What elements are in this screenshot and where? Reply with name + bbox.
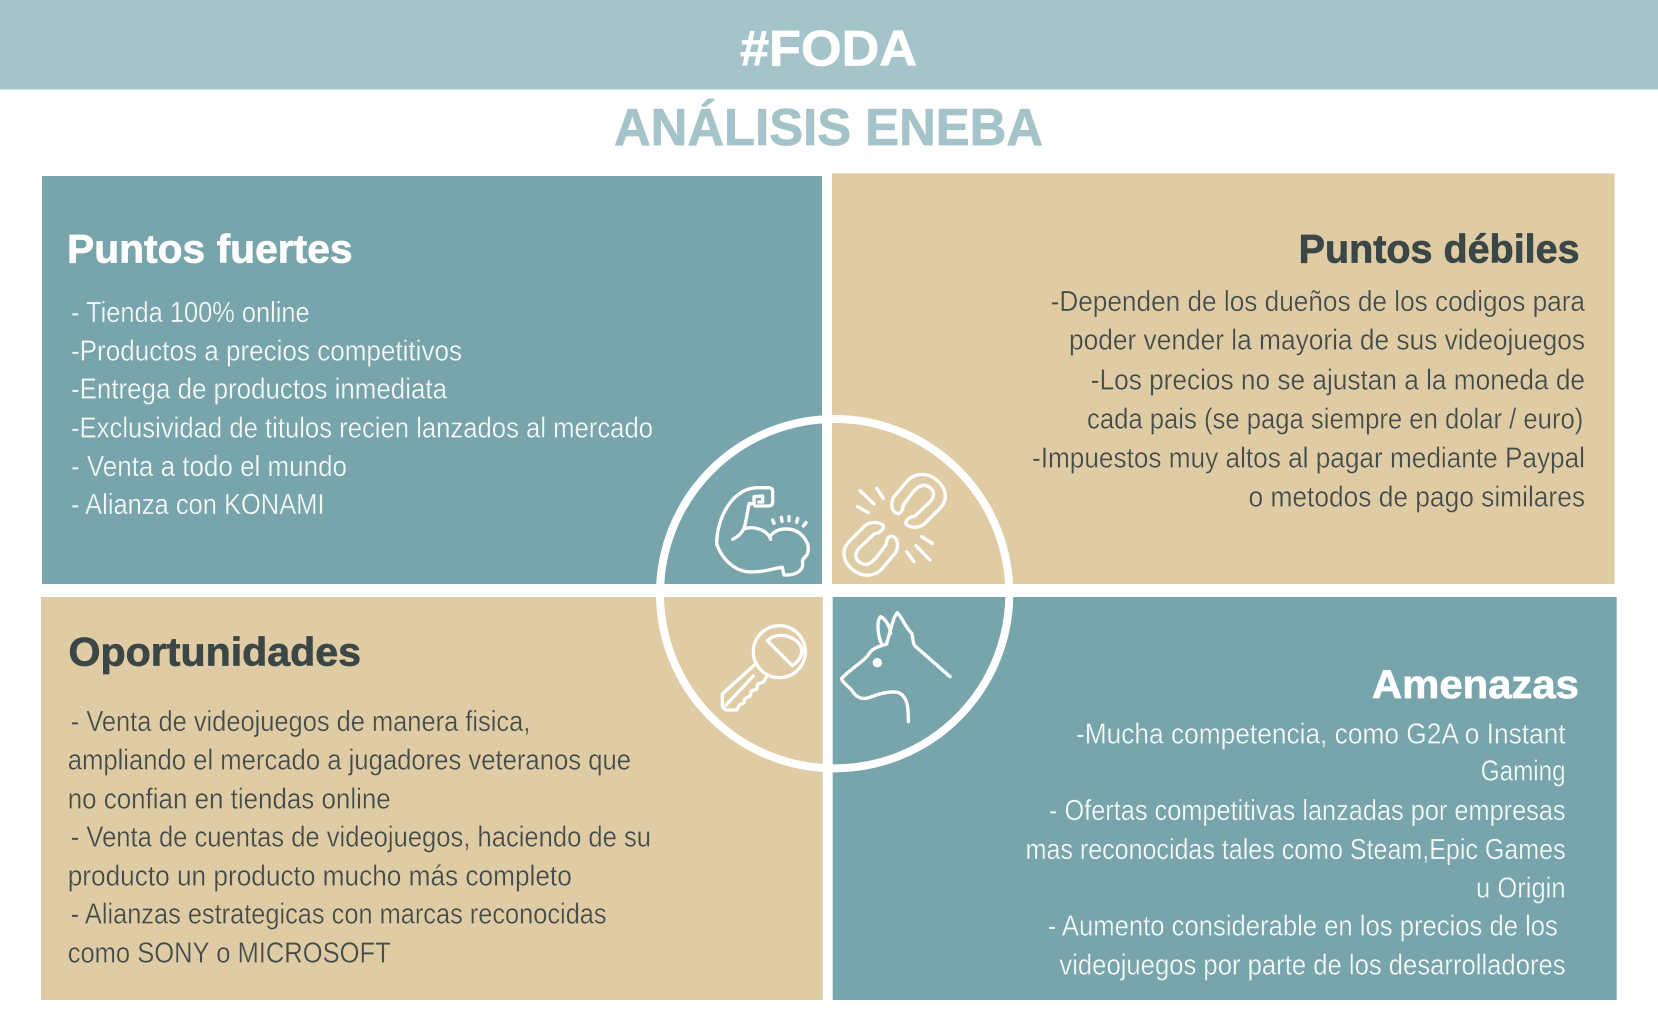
text block: oportunidades list: ampliando el mercado a jugadores veteranos que [68, 744, 631, 776]
text block: puntos fuertes list: -Entrega de productos inmediata [71, 373, 448, 405]
text block: amenazas list [1026, 718, 1566, 981]
text block: puntos fuertes list: - Alianza con KONAMI [71, 489, 324, 521]
text block: puntos debiles list: poder vender la mayoria de sus videojuegos [1069, 324, 1585, 356]
text block: oportunidades list: - Venta de videojuegos de manera fisica, [71, 706, 530, 738]
icon: flexed arm [717, 488, 808, 575]
panel: amenazas [833, 597, 1617, 1000]
panel: puntos fuertes [42, 176, 822, 584]
text block: puntos debiles list: -Dependen de los dueños de los codigos para [1051, 286, 1586, 318]
text block: amenazas list: - Ofertas competitivas lanzadas por empresas [1049, 795, 1566, 827]
subtitle: ANÁLISIS ENEBA [614, 99, 1043, 157]
text block: puntos debiles list [1032, 286, 1586, 514]
text block: amenazas list: Gaming [1481, 756, 1566, 788]
text block: amenazas list: -Mucha competencia, como G2A o Instant [1076, 718, 1566, 750]
text block: oportunidades list: producto un producto mucho más completo [68, 861, 572, 893]
text block: amenazas list: videojuegos por parte de los desarrolladores [1059, 949, 1566, 981]
title: #FODA [740, 21, 917, 77]
icon: broken chain [844, 475, 945, 575]
text block: puntos fuertes list [71, 297, 653, 521]
text block: puntos debiles list: -Los precios no se ajustan a la moneda de [1091, 364, 1585, 396]
text block: oportunidades list: - Venta de cuentas de videojuegos, haciendo de su [71, 822, 651, 854]
heading: puntos fuertes: Puntos fuertes [67, 228, 353, 272]
text block: puntos debiles list: cada pais (se paga siempre en dolar / euro) [1087, 403, 1583, 435]
heading: amenazas: Amenazas [1372, 663, 1579, 707]
center circle with icons [660, 419, 1009, 768]
text block: puntos fuertes list: - Tienda 100% online [71, 297, 310, 329]
heading: puntos debiles: Puntos débiles [1299, 228, 1580, 272]
text block: oportunidades list: como SONY o MICROSOFT [68, 937, 391, 969]
heading: oportunidades: Oportunidades [68, 631, 361, 675]
text block: puntos fuertes list: -Productos a precios competitivos [71, 336, 462, 368]
text block: amenazas list: - Aumento considerable en los precios de los [1048, 911, 1558, 943]
header band [0, 0, 1658, 90]
icon: key [722, 626, 805, 710]
text block: oportunidades list: - Alianzas estrategicas con marcas reconocidas [71, 898, 607, 930]
text block: puntos fuertes list: - Venta a todo el mundo [71, 451, 347, 483]
text block: amenazas list: u Origin [1476, 872, 1566, 904]
text block: puntos debiles list: o metodos de pago similares [1248, 482, 1585, 514]
icon: dog head [842, 613, 950, 722]
text block: oportunidades list: no confian en tiendas online [68, 783, 391, 815]
panel: oportunidades [41, 597, 823, 1000]
text block: puntos fuertes list: -Exclusividad de titulos recien lanzados al mercado [71, 412, 653, 444]
text block: amenazas list: mas reconocidas tales como Steam,Epic Games [1026, 834, 1566, 866]
text block: oportunidades list [68, 706, 651, 969]
panel: puntos debiles [832, 173, 1615, 584]
text block: puntos debiles list: -Impuestos muy altos al pagar mediante Paypal [1032, 443, 1585, 475]
